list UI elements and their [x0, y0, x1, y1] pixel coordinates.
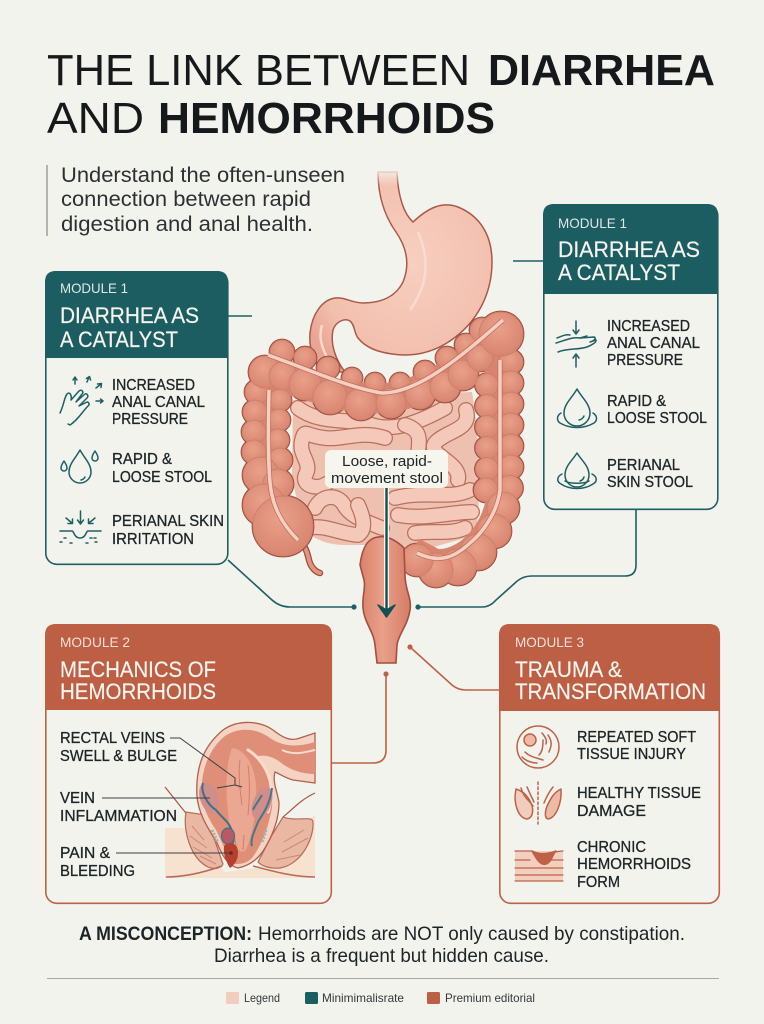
text: vein inflammation: INFLAMMATION	[60, 808, 177, 825]
stomach and esophagus	[310, 168, 492, 372]
panel: module 1 right: MODULE 1	[558, 215, 627, 231]
text: healthy tissue damage: HEALTHY TISSUE	[577, 785, 701, 802]
text: increased anal canal pressure: ANAL CANAL	[112, 394, 205, 411]
panel: module 3: TRANSFORMATION	[515, 679, 706, 704]
icon: hand with arrows	[60, 376, 103, 425]
text: rectal veins swell: SWELL & BULGE	[60, 748, 177, 765]
panel: module 1 left: DIARRHEA AS	[60, 303, 199, 328]
text: perianal skin irritation: IRRITATION	[112, 531, 194, 548]
icon: drop with double ripple	[558, 453, 596, 488]
panel: module 1 left: MODULE 1	[60, 280, 128, 296]
title: AND	[47, 94, 144, 143]
panel: module 3: MODULE 3	[515, 634, 584, 650]
legend: Legend	[244, 991, 280, 1005]
text: rapid and loose stool: RAPID &	[112, 451, 172, 468]
digestive system illustration	[242, 168, 523, 663]
panel: module 1 left	[45, 271, 228, 564]
icon: damaged cell	[517, 726, 559, 768]
text: chronic hemorrhoids form: CHRONIC	[577, 839, 646, 856]
icon: skin irritation	[60, 511, 101, 543]
panel: module 2: MECHANICS OF	[60, 657, 216, 682]
text: vein inflammation	[60, 790, 177, 825]
panel: module 1 right	[543, 204, 718, 509]
text: increased anal canal pressure: PRESSURE	[607, 352, 683, 369]
connector lines	[228, 261, 636, 763]
module 1 header	[45, 271, 228, 358]
title: THE LINK BETWEEN	[47, 46, 470, 95]
icon: healthy and damaged tissue	[515, 782, 561, 824]
subtitle: Understand the often-unseen	[61, 163, 345, 187]
panel: module 3	[499, 624, 720, 903]
legend	[226, 991, 535, 1005]
text: rectal veins swell	[60, 730, 177, 765]
text: pain and bleeding: BLEEDING	[60, 863, 135, 880]
text: perianal skin stool	[607, 457, 693, 491]
anatomy illustration	[102, 722, 315, 878]
title	[47, 46, 715, 143]
module 3 header	[499, 624, 720, 711]
panel: module 2: HEMORRHOIDS	[60, 679, 216, 704]
text: healthy tissue damage: DAMAGE	[577, 803, 646, 820]
panel: module 1 right: DIARRHEA AS	[558, 237, 700, 262]
callout: misconception: Diarrhea is a frequent but hidden cause.	[214, 945, 549, 967]
title: HEMORRHOIDS	[158, 94, 495, 143]
text: repeated soft tissue injury: TISSUE INJURY	[577, 746, 686, 763]
callout: misconception	[79, 923, 685, 967]
text: perianal skin irritation	[112, 513, 224, 548]
module 1 right header	[543, 204, 718, 294]
panel: module 3: TRAUMA &	[515, 657, 622, 682]
text: rapid and loose stool	[607, 393, 707, 427]
legend: Minimimalisrate	[322, 991, 404, 1005]
text: rapid and loose stool	[112, 451, 212, 486]
text: perianal skin stool: PERIANAL	[607, 457, 680, 474]
text: chronic hemorrhoids form: HEMORRHOIDS	[577, 856, 691, 873]
subtitle	[46, 163, 345, 236]
module 2 header	[45, 624, 332, 710]
icon: water drops	[61, 450, 98, 483]
icon: drop with ripple	[558, 389, 596, 428]
text: increased anal canal pressure	[112, 377, 205, 428]
text: increased anal canal pressure	[607, 318, 700, 369]
label: loose stool: Loose, rapid-	[342, 453, 432, 470]
text: chronic hemorrhoids form: FORM	[577, 874, 620, 891]
text: perianal skin stool: SKIN STOOL	[607, 474, 693, 491]
text: chronic hemorrhoids form	[577, 839, 691, 891]
subtitle: connection between rapid	[61, 187, 311, 211]
label: loose stool	[325, 450, 448, 488]
text: rapid and loose stool: LOOSE STOOL	[607, 410, 707, 427]
appendix	[298, 540, 320, 573]
text: increased anal canal pressure: INCREASED	[112, 377, 195, 394]
panel: module 2: MODULE 2	[60, 634, 130, 650]
text: perianal skin irritation: PERIANAL SKIN	[112, 513, 224, 530]
callout: misconception: Hemorrhoids are NOT only caused by constipation.	[258, 923, 685, 945]
large intestine	[242, 312, 523, 587]
subtitle: digestion and anal health.	[61, 212, 313, 236]
panel: module 1 right: A CATALYST	[558, 260, 680, 285]
text: vein inflammation: VEIN	[60, 790, 95, 807]
icon: tissue layers	[515, 851, 563, 881]
text: pain and bleeding	[60, 845, 135, 880]
title: DIARRHEA	[488, 46, 715, 95]
panel: module 2	[45, 624, 332, 903]
panel: module 1 left: A CATALYST	[60, 327, 178, 352]
text: rapid and loose stool: LOOSE STOOL	[112, 469, 212, 486]
text: healthy tissue damage	[577, 785, 701, 820]
small intestine	[292, 392, 479, 548]
legend: Premium editorial	[445, 991, 535, 1005]
text: repeated soft tissue injury: REPEATED SOFT	[577, 729, 696, 746]
text: increased anal canal pressure: PRESSURE	[112, 411, 188, 428]
text: rapid and loose stool: RAPID &	[607, 393, 666, 410]
text: pain and bleeding: PAIN &	[60, 845, 110, 862]
arrow: stool movement	[378, 488, 395, 617]
text: rectal veins swell: RECTAL VEINS	[60, 730, 165, 747]
label: loose stool: movement stool	[331, 470, 443, 487]
callout: misconception: A MISCONCEPTION:	[79, 923, 252, 945]
text: increased anal canal pressure: INCREASED	[607, 318, 690, 335]
text: repeated soft tissue injury	[577, 729, 696, 763]
rectum	[360, 537, 410, 663]
text: increased anal canal pressure: ANAL CANAL	[607, 335, 700, 352]
icon: hand under pressure	[556, 321, 596, 367]
